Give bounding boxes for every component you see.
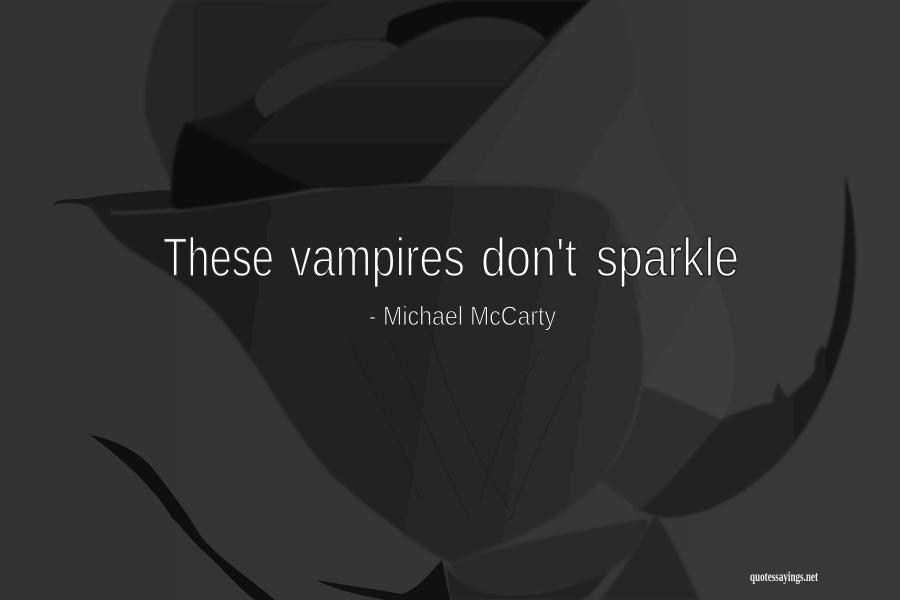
upper mid petal [287,0,450,48]
bottom sepal band [450,518,648,594]
lobed inner petal [255,41,400,117]
author: Michael [383,301,463,331]
right sepal and curled stem [640,175,855,517]
quote text: sparkle [596,226,739,288]
bottom shadow [446,565,610,600]
tip petal top fold [53,190,178,214]
bottom center leaf [316,560,450,600]
quote text [163,226,739,288]
author: - [369,301,376,331]
main front petal [80,183,643,562]
upper right light petal [420,0,735,510]
shade where petals meet [600,385,722,512]
stem below the bloom [600,515,700,600]
author [369,301,556,331]
quote text: These [163,226,274,288]
quote text: vampires [290,226,465,288]
dark shadow left of inner lobes [180,95,320,205]
watermark: quotessayings.net [750,570,818,585]
vein lines [350,330,580,520]
bottom left leaf [90,435,275,600]
inner left fold [172,122,310,210]
central dark petal [243,17,545,188]
outer dark petal [145,0,590,205]
quote text: don't [481,226,577,288]
top black shadow [386,0,590,52]
front petal rim highlight [110,184,640,300]
author: McCarty [470,301,556,331]
